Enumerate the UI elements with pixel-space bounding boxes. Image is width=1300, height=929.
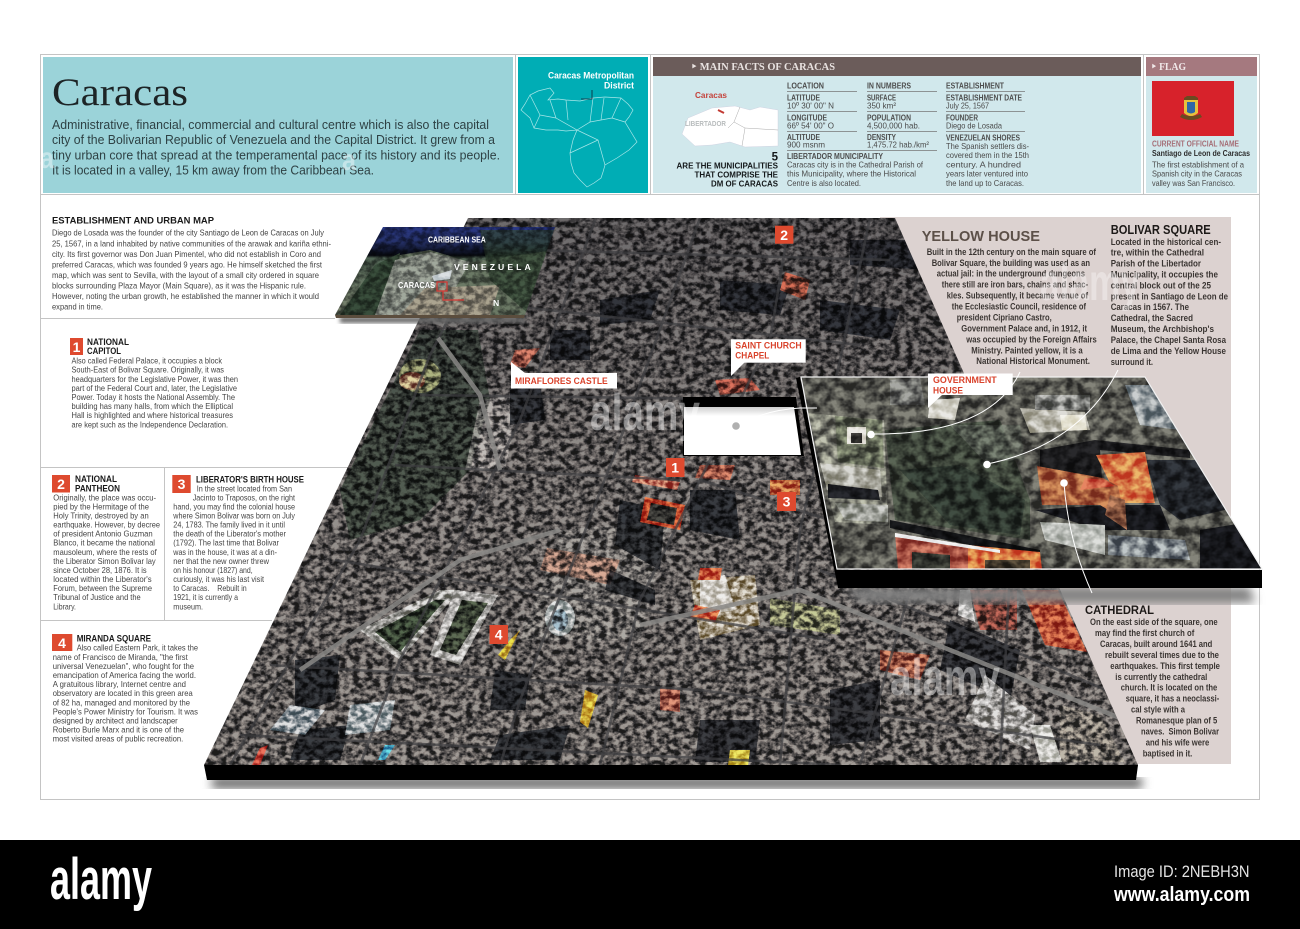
- marker 2: 2: [780, 227, 788, 243]
- column: in numbers: [867, 82, 929, 150]
- note 4: Miranda Square: MIRANDA SQUARE: [77, 633, 151, 643]
- note 2: National Pantheon: NATIONAL: [75, 474, 118, 484]
- note: Cathedral: On the east side of the square, one: [1090, 617, 1218, 627]
- note 4: Miranda Square: Also called Eastern Park, it takes the: [77, 643, 198, 653]
- locator heading: [548, 70, 635, 92]
- label: Government House: GOVERNMENT: [933, 375, 997, 386]
- dark tower shadows: [290, 240, 1020, 762]
- note 3: Liberator's Birth House: curiously, it was his last visit: [173, 574, 265, 584]
- flag heading: ‣ FLAG: [1151, 62, 1186, 73]
- note 3: Liberator's Birth House: hand, you may find the colonial house: [173, 501, 295, 511]
- satellite image: [200, 215, 1145, 770]
- note 1: National Capitol: 1: [73, 339, 81, 355]
- note 2: National Pantheon: located within the Liberator's: [53, 574, 152, 584]
- footer website: www.alamy.com: [1113, 884, 1250, 906]
- panel: establishment and urban map text: [52, 215, 331, 312]
- column: in numbers: 350 km²: [867, 101, 896, 111]
- note: Bolivar Square: [1111, 223, 1228, 367]
- note 3: Liberator's Birth House: to Caracas. Rebuilt in: [173, 583, 247, 593]
- column: establishment: The Spanish settlers dis-: [946, 141, 1029, 151]
- municipalities note: [676, 152, 779, 188]
- note 2: National Pantheon: since October 28, 1876. It is: [53, 565, 147, 575]
- introduction text: [52, 117, 500, 178]
- note 2: National Pantheon: pied by the Hermitage of the: [53, 501, 149, 511]
- marker 1: [666, 458, 684, 477]
- locator heading: Caracas Metropolitan: [548, 70, 634, 82]
- note 4: Miranda Square: of 82 ha, managed and monitored by the: [53, 697, 190, 707]
- facts rules: [787, 92, 1025, 150]
- note: Yellow House: YELLOW HOUSE: [922, 228, 1040, 245]
- Libertador municipality note: Centre is also located.: [787, 178, 861, 188]
- note 3: Liberator's Birth House: where Simon Bolivar was born on July: [172, 510, 296, 520]
- column: location: 900 msnm: [787, 140, 825, 150]
- inset texture overlay: [800, 376, 1265, 571]
- municipalities map: Caracas: [695, 90, 727, 100]
- note 1: National Capitol: Hall is highlighted and where historical treasures: [72, 410, 233, 420]
- note: Bolivar Square: Parish of the Libertador: [1111, 259, 1202, 269]
- note: Cathedral: Caracas, built around 1641 and: [1100, 639, 1212, 649]
- municipalities map: LIBERTADOR: [685, 121, 726, 128]
- note 3: Liberator's Birth House: 24, 1783. The family lived in it until: [173, 520, 285, 530]
- note 4: Miranda Square: observatory are located in this green area: [53, 688, 193, 698]
- establishment body: 25, 1567, in a land inhabited by native communities of the arawak and kariña ethni-: [52, 238, 331, 248]
- introduction text: tiny urban core that spread at the temperamental pace of its history and its people.: [52, 148, 500, 162]
- map drop shadow: [212, 778, 1142, 788]
- column: location: 10º 30' 00" N: [787, 101, 834, 111]
- column: establishment: century. A hundred: [946, 160, 1021, 170]
- introduction text: Administrative, financial, commercial and cultural centre which is also the capital: [52, 117, 489, 132]
- column: in numbers: 1,475.72 hab./km²: [867, 140, 929, 150]
- yellow and red roof accents: [252, 630, 750, 765]
- locator labels: CARIBBEAN SEA: [428, 235, 486, 245]
- note 3: Liberator's Birth House: was in the house, it was at a din-: [172, 547, 277, 557]
- note: Cathedral: is currently the cathedral: [1115, 672, 1207, 682]
- column: establishment: Diego de Losada: [946, 121, 1002, 131]
- Miranda Square green areas: [360, 590, 575, 665]
- watermarks: alamy: [1040, 254, 1140, 312]
- locator Caracas marker: [437, 282, 464, 300]
- marker 3: 3: [783, 494, 791, 510]
- plaza trees: [885, 420, 1030, 540]
- locator labels: CARACAS: [398, 280, 435, 290]
- note 1: National Capitol: Power. Today it hosts the National Assembly. The: [72, 392, 235, 402]
- watermarks: alamy: [890, 649, 1000, 707]
- panel: Caracas Metropolitan District locator: [518, 57, 648, 193]
- note: Bolivar Square: surround it.: [1111, 357, 1153, 367]
- note 1: National Capitol: South-East of Bolivar Square. Originally, it was: [72, 365, 224, 375]
- column: establishment: FOUNDER: [946, 114, 978, 123]
- flag text: CURRENT OFFICIAL NAME: [1152, 140, 1240, 149]
- note: Bolivar Square: Palace, the Chapel Santa Rosa: [1111, 335, 1226, 345]
- municipalities map: [682, 90, 778, 147]
- note 4: Miranda Square: name of Francisco de Miranda, "the first: [53, 652, 188, 662]
- dark road shadows: [1040, 440, 1190, 478]
- note 1: National Capitol: Also called Federal Palace, it occupies a block: [72, 356, 223, 366]
- south white building: [1040, 522, 1105, 555]
- locator edge: [335, 315, 525, 318]
- locator shadow: [340, 317, 525, 323]
- column: establishment: years later ventured into: [946, 169, 1028, 179]
- note: Cathedral: cal style with a: [1131, 705, 1185, 715]
- note 2: National Pantheon: Forum, between the Supreme: [53, 583, 152, 593]
- note 3: Liberator's Birth House: In the street located from San: [197, 483, 292, 493]
- note 1: National Capitol: NATIONAL: [87, 337, 130, 347]
- footer band: [0, 840, 1300, 929]
- note: Yellow House: [922, 228, 1097, 366]
- dark green park: [340, 330, 490, 540]
- panel: title and introduction: [43, 57, 513, 193]
- note 2: National Pantheon: 2: [57, 476, 65, 492]
- municipalities note: 5: [772, 152, 779, 164]
- establishment body: [52, 228, 331, 312]
- label: Miraflores Castle: [511, 362, 617, 388]
- note 2: National Pantheon: [52, 474, 160, 611]
- locator terrain: [330, 225, 560, 317]
- note: Bolivar Square: central block out of the 25: [1111, 281, 1211, 291]
- flag text: valley was San Francisco.: [1152, 178, 1235, 188]
- column: establishment: ESTABLISHMENT DATE: [946, 94, 1023, 103]
- note 2: National Pantheon: earthquake. However, by decree: [53, 520, 160, 530]
- note 4: Miranda Square: People's Power Ministry for Tourism. It was: [53, 706, 198, 716]
- column: establishment: covered them in the 15th: [946, 150, 1029, 160]
- note: Bolivar Square: Cathedral, the Sacred: [1111, 313, 1193, 323]
- note 1: National Capitol: are kept such as the Independence Declaration.: [72, 419, 228, 429]
- note: Yellow House: Government Palace and, in 1912, it: [961, 323, 1087, 333]
- column: location: LATITUDE: [787, 94, 821, 103]
- note 4: Miranda Square: emancipation of America facing the world.: [53, 670, 196, 680]
- note: Cathedral: CATHEDRAL: [1085, 603, 1154, 617]
- municipalities note: ARE THE MUNICIPALITIES: [676, 160, 778, 170]
- establishment body: expand in time.: [52, 302, 103, 312]
- note: Cathedral: earthquakes. This first temple: [1110, 661, 1220, 671]
- column: location: LONGITUDE: [787, 114, 828, 123]
- streets: [230, 218, 1130, 765]
- label: Government House: HOUSE: [933, 386, 964, 397]
- note 4: Miranda Square: 4: [58, 635, 66, 651]
- marker 1: 1: [671, 460, 679, 476]
- note 2: National Pantheon: Blanco, it became the national: [53, 538, 155, 548]
- note: Yellow House: the Ecclesiastic Council, residence of: [952, 301, 1086, 311]
- small locator map of Caracas and the Caribbean: [330, 225, 560, 323]
- introduction text: It is located in a valley, 15 km away from the Caribbean Sea.: [52, 162, 374, 178]
- inset drop shadow: [842, 587, 1255, 603]
- column: location: LOCATION: [787, 82, 824, 90]
- Caracas marker: [581, 90, 592, 99]
- locator heading: District: [604, 80, 635, 92]
- title: Caracas: [52, 71, 188, 114]
- panel: flag: [1146, 57, 1257, 193]
- note 4: Miranda Square: Roberto Burle Marx and it is one of the: [53, 725, 184, 735]
- note: Cathedral: may find the first church of: [1095, 628, 1194, 638]
- note 2: National Pantheon: mausoleum, where the rests of: [53, 547, 157, 557]
- note 3: Liberator's Birth House: the death of the Liberator's mother: [173, 529, 286, 539]
- note: Bolivar Square: de Lima and the Yellow House: [1111, 346, 1226, 356]
- label: Miraflores Castle: MIRAFLORES CASTLE: [515, 376, 608, 387]
- enlarged inset of Bolivar Square: [732, 370, 1265, 603]
- note 4: Miranda Square: designed by architect and landscaper: [53, 716, 178, 726]
- note: Cathedral: [1085, 603, 1220, 759]
- note 3: Liberator's Birth House: [172, 474, 304, 611]
- locator labels: VENEZUELA: [454, 262, 531, 272]
- locator labels: N: [493, 298, 499, 308]
- watermarks: alamy: [590, 384, 700, 442]
- darker upper part of the image: [275, 218, 1087, 710]
- note: Yellow House: National Historical Monument.: [976, 356, 1090, 366]
- note 3: Liberator's Birth House: Jacinto to Traposos, on the right: [193, 492, 296, 502]
- note 4: Miranda Square: [52, 633, 198, 744]
- note: Cathedral: square, it has a neoclassi-: [1126, 694, 1219, 704]
- map label markers: [490, 226, 796, 644]
- map of Venezuela: [521, 88, 637, 187]
- note 2: National Pantheon: of president Antonio Guzman: [53, 529, 153, 539]
- note: Cathedral: and his wife were: [1146, 738, 1209, 748]
- note 2: National Pantheon: Tribunal of Justice and the: [53, 592, 141, 602]
- building texture overlay: [200, 215, 1145, 770]
- inset black base: [796, 377, 1262, 588]
- map black base: [204, 765, 1138, 780]
- Libertador municipality note: LIBERTADOR MUNICIPALITY: [787, 152, 884, 161]
- flag of Caracas: [1152, 81, 1234, 136]
- market building roofs: [880, 590, 1125, 762]
- column: establishment: ESTABLISHMENT: [946, 82, 1004, 90]
- blanked detail area with black border: [683, 397, 804, 456]
- note: Cathedral: rebuilt several times due to the: [1105, 650, 1219, 660]
- note 4: Miranda Square: universal Venezuelan", who fought for the: [53, 661, 194, 671]
- outer frame: [40, 54, 1260, 800]
- note 4: Miranda Square: most visited areas of public recreation.: [53, 734, 183, 744]
- note: Bolivar Square: BOLIVAR SQUARE: [1111, 223, 1211, 237]
- column: in numbers: SURFACE: [867, 94, 896, 103]
- note 3: Liberator's Birth House: 1921, it is currently a: [173, 592, 238, 602]
- Libertador municipality note: Caracas city is in the Cathedral Parish of: [787, 160, 924, 170]
- establishment body: However, noting the urban growth, he established the manner in which it would: [52, 291, 319, 301]
- note 1: National Capitol: building has many halls, from which the Elliptical: [72, 401, 233, 411]
- establishment heading: ESTABLISHMENT AND URBAN MAP: [52, 215, 215, 226]
- column: location: 66º 54' 00" O: [787, 121, 834, 131]
- note 3: Liberator's Birth House: (1792). The last time that Bolivar: [173, 538, 279, 548]
- establishment body: city. Its first governor was Don Juan Pimentel, who did not establish in Coro and: [52, 249, 321, 259]
- label: Saint Church Chapel: [731, 339, 806, 376]
- note: Yellow House: actual jail: in the underground dungeons: [937, 269, 1085, 279]
- south orange palace: [895, 533, 968, 569]
- locator labels: [398, 235, 531, 308]
- marker 4: 4: [495, 626, 503, 642]
- establishment body: preferred Caracas, which was founded 9 years ago. He himself sketched the first: [52, 260, 323, 270]
- column: in numbers: 4,500,000 hab.: [867, 121, 920, 131]
- label: Government House: [928, 374, 1013, 408]
- note 2: National Pantheon: PANTHEON: [75, 483, 120, 493]
- footer logo: alamy: [50, 847, 152, 912]
- main boulevards: [300, 338, 1125, 720]
- note 3: Liberator's Birth House: ner that the new owner threw: [173, 556, 270, 566]
- footer image id: Image ID: 2NEBH3N: [1114, 862, 1250, 881]
- light buildings: [465, 395, 520, 470]
- municipalities note: THAT COMPRISE THE: [694, 170, 778, 180]
- column: in numbers: DENSITY: [867, 133, 897, 142]
- flag text: Spanish city in the Caracas: [1152, 169, 1242, 179]
- municipalities note: DM OF CARACAS: [711, 178, 778, 188]
- note: Yellow House: president Cipriano Castro,: [957, 312, 1052, 322]
- note: Bolivar Square: tre, within the Cathedral: [1111, 248, 1204, 258]
- note: Yellow House: was occupied by the Foreign Affairs: [965, 334, 1097, 344]
- note 2: National Pantheon: Library.: [53, 601, 76, 611]
- note: Yellow House: Ministry. Painted yellow, it is a: [971, 345, 1083, 355]
- Bolivar forum buildings: [510, 272, 810, 530]
- plaza construction area: [690, 568, 840, 640]
- marker 3: [777, 492, 796, 511]
- column: establishment: [946, 82, 1029, 188]
- note: Bolivar Square: Located in the historical cen-: [1111, 237, 1221, 247]
- note: Cathedral: naves. Simon Bolivar: [1141, 727, 1219, 737]
- note: Yellow House: there still are iron bars, chains and shac-: [942, 280, 1088, 290]
- column: location: [787, 82, 834, 150]
- column: establishment: July 25, 1567: [946, 101, 989, 111]
- terracotta block: [540, 548, 620, 585]
- note 3: Liberator's Birth House: LIBERATOR'S BIRTH HOUSE: [196, 474, 304, 484]
- label: Saint Church Chapel: SAINT CHURCH: [735, 340, 802, 351]
- callout lines: [736, 370, 1118, 593]
- note: Cathedral: church. It is located on the: [1121, 683, 1217, 693]
- facts heading: ‣ MAIN FACTS OF CARACAS: [691, 62, 835, 73]
- Libertador municipality note: [787, 152, 924, 188]
- label: Saint Church Chapel: CHAPEL: [735, 350, 769, 362]
- note 3: Liberator's Birth House: on his honour (1827) and,: [173, 565, 253, 575]
- panel: beige background for text notes: [880, 217, 1231, 764]
- column: in numbers: IN NUMBERS: [867, 82, 912, 90]
- flag text: [1152, 140, 1250, 188]
- column: establishment: the land up to Caracas.: [946, 178, 1024, 188]
- note 4: Miranda Square: A gratuitous library, Internet centre and: [53, 679, 186, 689]
- note 3: Liberator's Birth House: 3: [178, 476, 186, 492]
- note 1: National Capitol: [70, 337, 238, 429]
- note 2: National Pantheon: the Liberator Simon Bolivar lay: [53, 556, 156, 566]
- note: Cathedral: Romanesque plan of 5: [1136, 716, 1217, 726]
- flag text: The first establishment of a: [1152, 159, 1244, 169]
- north buildings: [1020, 408, 1090, 433]
- note: Bolivar Square: Caracas in 1567. The: [1111, 302, 1189, 312]
- main satellite map block: [200, 215, 1145, 788]
- Government House: [808, 413, 888, 525]
- note 1: National Capitol: CAPITOL: [87, 346, 122, 356]
- note 2: National Pantheon: Holy Trinity, destroyed by an: [53, 510, 149, 520]
- column: in numbers: POPULATION: [867, 114, 911, 123]
- Libertador municipality note: this Municipality, where the Historical: [787, 169, 916, 179]
- flag text: Santiago de Leon de Caracas: [1152, 148, 1250, 158]
- note 2: National Pantheon: Originally, the place was occu-: [53, 492, 156, 502]
- note: Cathedral: baptised in it.: [1143, 749, 1192, 759]
- note: Bolivar Square: Museum, the Archbishop's: [1111, 324, 1214, 334]
- note: Yellow House: Bolivar Square, the building was used as an: [932, 258, 1090, 268]
- note 1: National Capitol: part of the Federal Court and, later, the Legislative: [72, 383, 237, 393]
- introduction text: city of the Bolivarian Republic of Venezuela and the Capital District. It grew from a: [52, 132, 496, 147]
- note: Bolivar Square: Municipality, it occupies the: [1111, 270, 1218, 280]
- inset white border: [801, 377, 1262, 569]
- note: Bolivar Square: present in Santiago de Leon de: [1111, 291, 1228, 301]
- inset photo: [800, 376, 1265, 571]
- watermarks: a: [342, 144, 356, 177]
- ball field: [399, 359, 441, 393]
- note: Yellow House: kles. Subsequently, it became venue of: [947, 290, 1088, 300]
- marker 4: [490, 625, 508, 644]
- note 1: National Capitol: headquarters for the Legislative Power, it was then: [72, 374, 238, 384]
- marker 2: [775, 226, 793, 244]
- Cathedral roofs: [1096, 452, 1155, 503]
- watermarks: [40, 142, 1140, 707]
- column: establishment: VENEZUELAN SHORES: [946, 134, 1021, 143]
- note 3: Liberator's Birth House: museum.: [173, 601, 203, 611]
- column: location: ALTITUDE: [787, 133, 821, 142]
- establishment body: blocks surrounding Plaza Mayor (Main Square), as it was the Hispanic rule.: [52, 280, 306, 290]
- establishment body: Diego de Losada was the founder of the city Santiago de Leon de Caracas on July: [52, 228, 325, 238]
- panel: main facts of Caracas: [653, 57, 1141, 193]
- watermarks: a: [40, 142, 54, 175]
- callout dots: [867, 431, 1068, 487]
- establishment body: map, which was sent to Sevilla, with the layout of a small city ordered in square: [52, 270, 319, 280]
- note: Yellow House: Built in the 12th century on the main square of: [927, 247, 1096, 257]
